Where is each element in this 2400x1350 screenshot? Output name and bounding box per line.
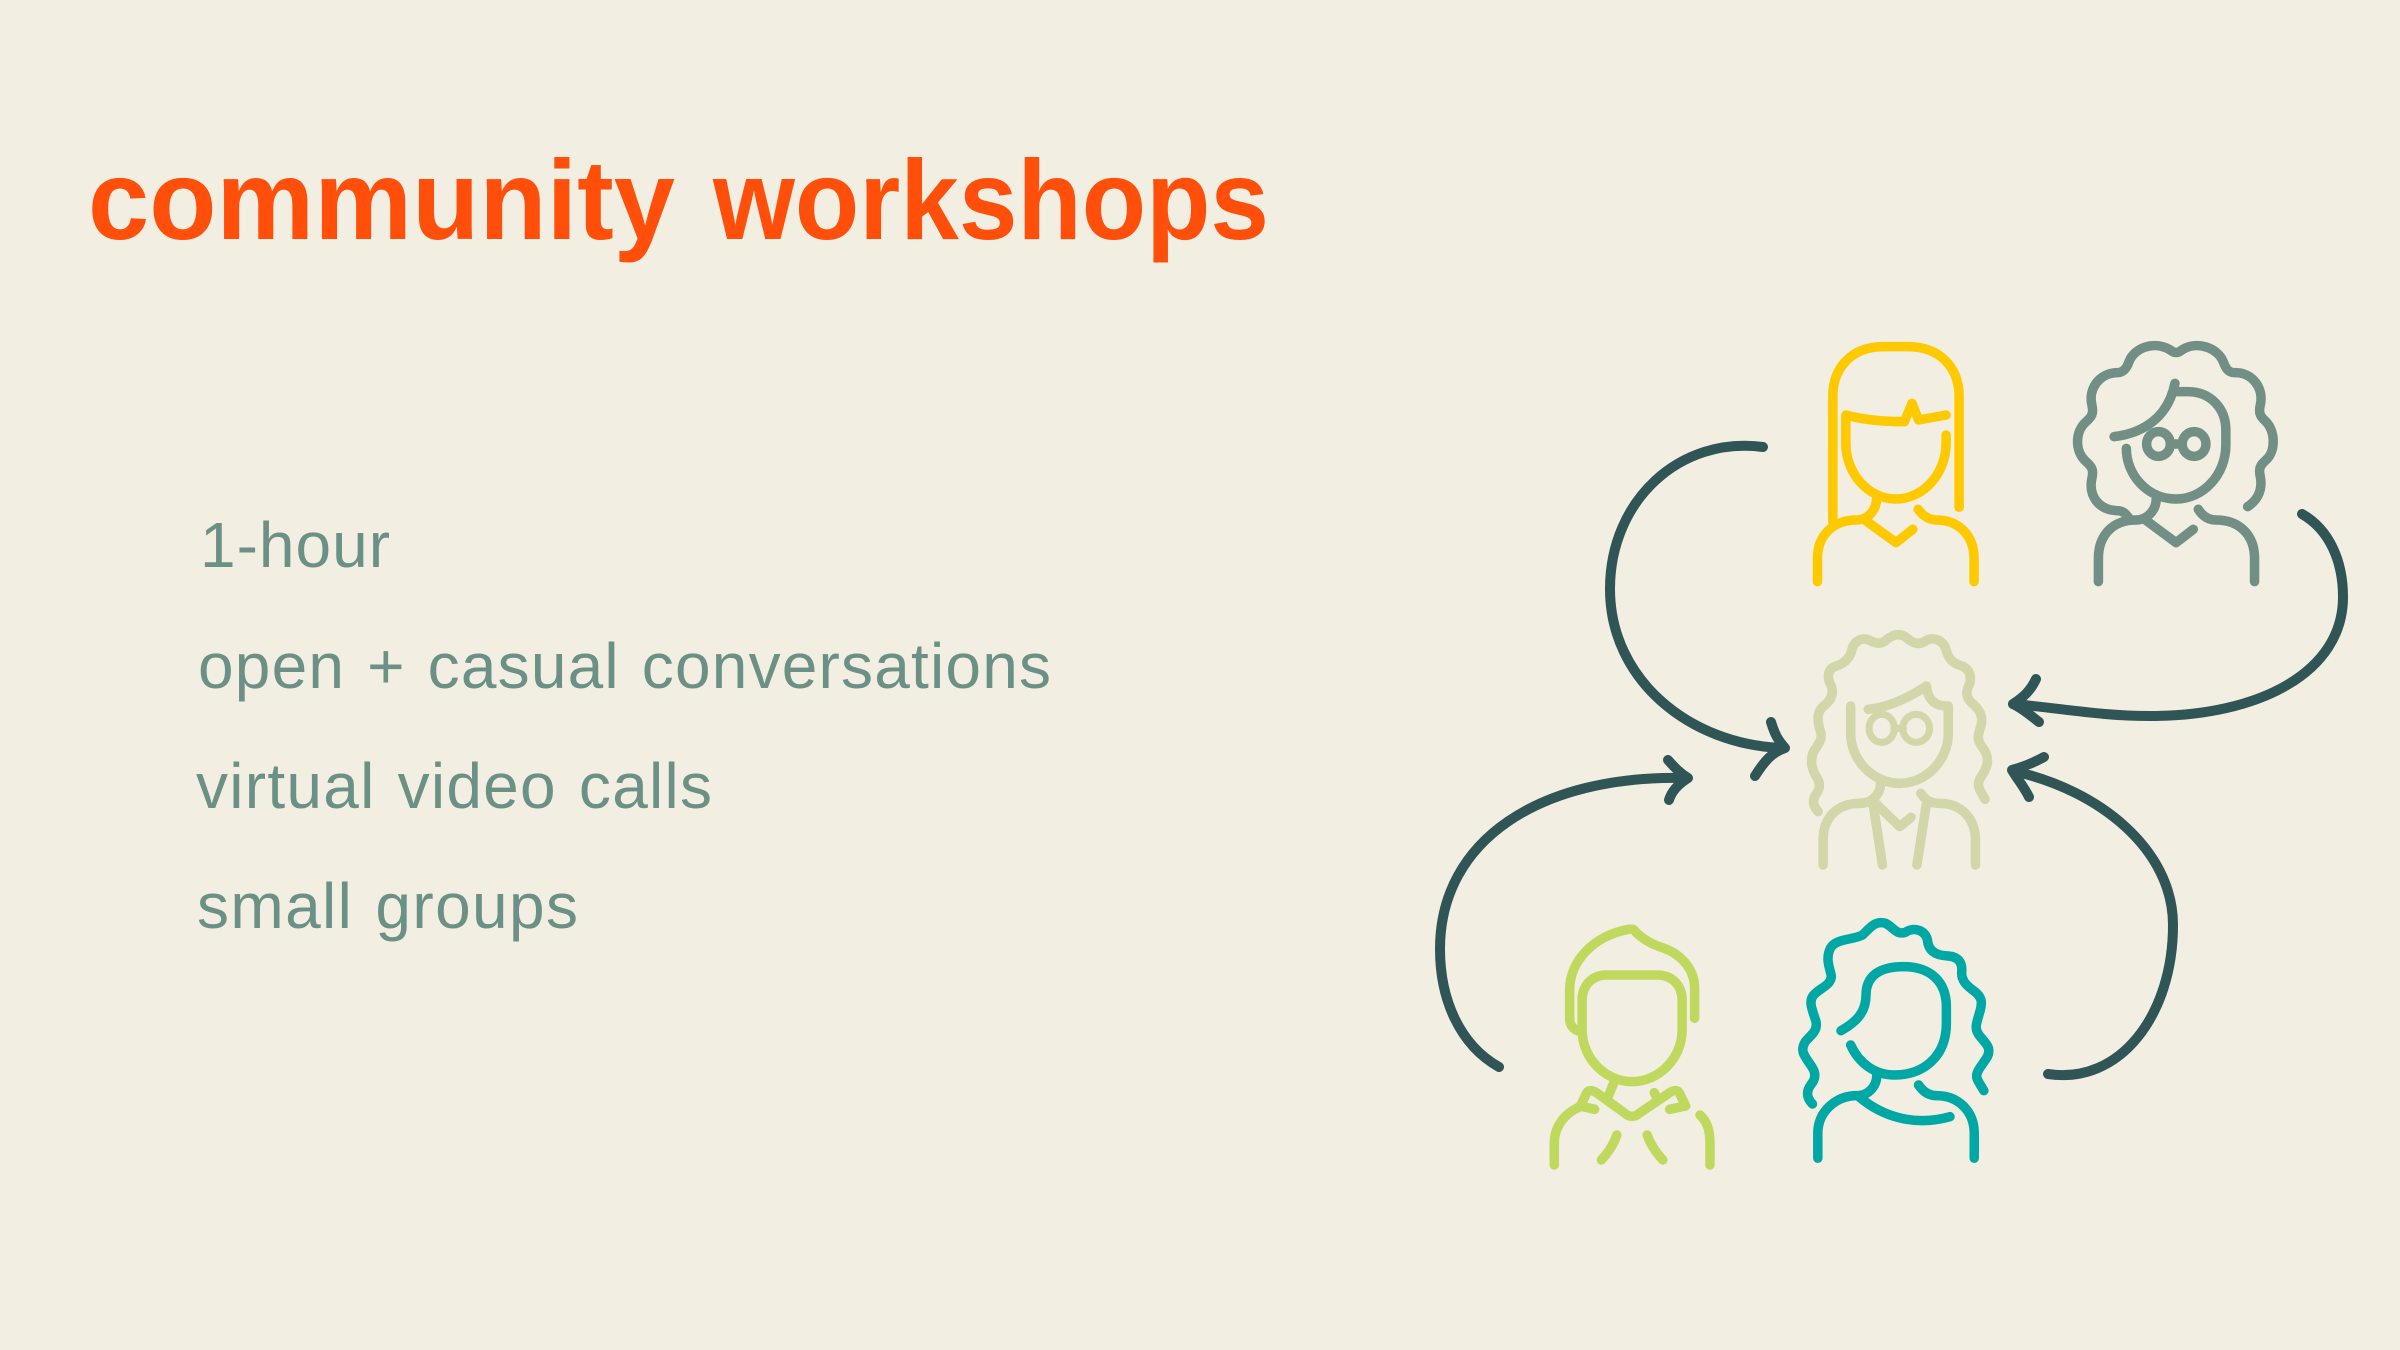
icon: pale green central person with curly hair and glasses — [1812, 635, 1987, 865]
icon: yellow person with long straight hair — [1818, 347, 1974, 582]
icon: teal person with long wavy hair — [1803, 923, 1989, 1158]
title: workshops — [712, 137, 1269, 263]
text: conversation style: open + casual conversations — [198, 630, 1051, 702]
arrow: lime person to centre — [1440, 760, 1688, 1067]
arrow: teal person to centre — [2012, 757, 2173, 1075]
text: duration: 1-hour — [200, 509, 390, 581]
text: group size: small groups — [197, 870, 578, 942]
text block: workshop details — [196, 509, 1051, 942]
title — [88, 137, 1269, 263]
text: format: virtual video calls — [196, 750, 712, 822]
icon: grey-green person with curly hair and glasses — [2078, 346, 2273, 582]
arrow: yellow person to centre — [1610, 446, 1785, 776]
title: community — [88, 137, 675, 263]
icon: lime person with short hair and hooded collar — [1554, 929, 1710, 1165]
arrow: grey-green person to centre — [2013, 514, 2343, 722]
